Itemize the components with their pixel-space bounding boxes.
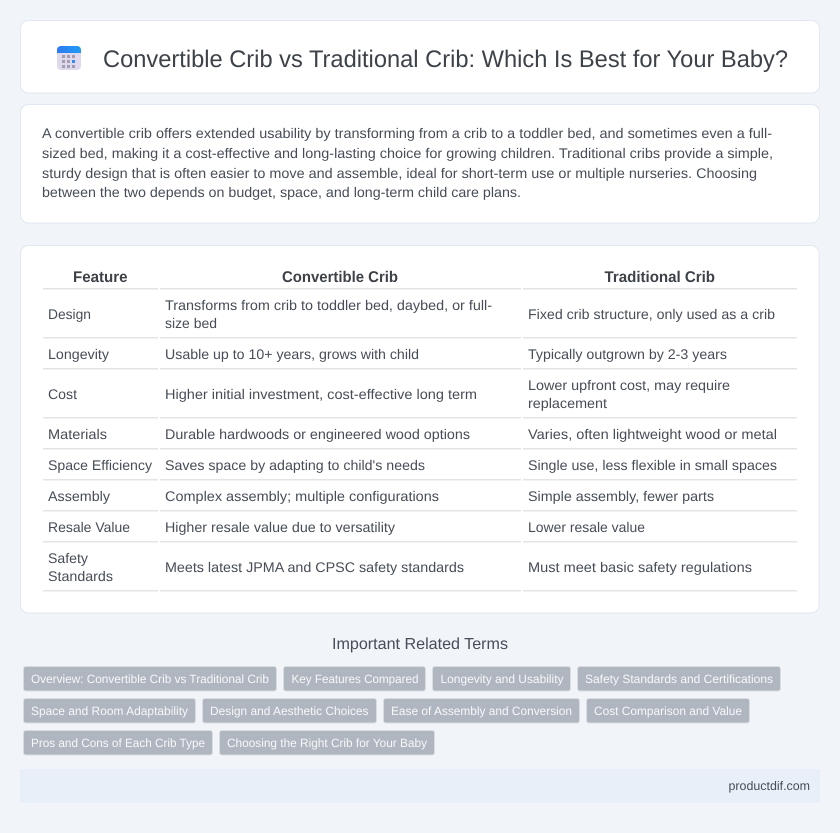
- pill: [578, 666, 780, 691]
- heading: important related terms: Important Related Terms: [332, 636, 508, 653]
- row: assembly: Complex assembly; multiple configurations: [165, 488, 439, 504]
- row: longevity: Typically outgrown by 2-3 years: [528, 346, 727, 362]
- row: resale value: [48, 519, 645, 535]
- pill: Overview: Convertible Crib vs Traditional Crib: [31, 672, 269, 686]
- row: assembly: Simple assembly, fewer parts: [528, 488, 714, 504]
- panel: intro paragraph: sturdy design that is often easier to move and assemble, ideal for short-term use or multiple nurseries. Choosing: [42, 165, 757, 181]
- pill: Design and Aesthetic Choices: [210, 704, 368, 718]
- row: resale value: Resale Value: [48, 519, 130, 535]
- pill: [384, 698, 580, 723]
- pill: Space and Room Adaptability: [31, 704, 188, 718]
- pill: [24, 666, 276, 691]
- row: longevity: [48, 346, 727, 362]
- pill: Ease of Assembly and Conversion: [391, 704, 572, 718]
- row: space efficiency: Saves space by adapting to child's needs: [165, 457, 425, 473]
- pill: [586, 698, 750, 723]
- row: design: size bed: [165, 315, 217, 331]
- pill: [432, 666, 570, 691]
- panel: intro paragraph: sized bed, making it a cost-effective and long-lasting choice for growing children. Traditional cribs provide a simple,: [42, 145, 773, 161]
- row: design: Design: [48, 306, 91, 322]
- row: longevity: Longevity: [48, 346, 109, 362]
- title: Convertible Crib vs Traditional Crib: Which Is Best for Your Baby?: [103, 46, 788, 73]
- pill: [24, 698, 196, 723]
- row: materials: [48, 426, 777, 442]
- row: space efficiency: [48, 457, 777, 473]
- row: cost: [48, 377, 730, 411]
- pill: Safety Standards and Certifications: [585, 672, 773, 686]
- table header: Traditional Crib: [604, 269, 715, 286]
- related term pills: [24, 666, 780, 755]
- row: safety standards: Meets latest JPMA and CPSC safety standards: [165, 559, 464, 575]
- pill: [220, 730, 434, 755]
- row: materials: Materials: [48, 426, 107, 442]
- pill: Choosing the Right Crib for Your Baby: [227, 736, 427, 750]
- row: cost: Higher initial investment, cost-effective long term: [165, 386, 477, 402]
- row: space efficiency: Single use, less flexible in small spaces: [528, 457, 777, 473]
- row: resale value: Lower resale value: [528, 519, 645, 535]
- row: cost: Cost: [48, 386, 77, 402]
- pill: [202, 698, 376, 723]
- row: materials: Durable hardwoods or engineered wood options: [165, 426, 470, 442]
- footer: [20, 769, 820, 803]
- row: safety standards: Standards: [48, 568, 113, 584]
- pill: Key Features Compared: [292, 672, 418, 686]
- pill: [284, 666, 426, 691]
- row: cost: replacement: [528, 395, 607, 411]
- panel: title header: [20, 20, 820, 93]
- panel: intro paragraph: [20, 104, 820, 223]
- panel: intro paragraph: A convertible crib offers extended usability by transforming from a crib to a toddler bed, and sometimes even a full-: [42, 125, 772, 141]
- row: longevity: Usable up to 10+ years, grows with child: [165, 346, 419, 362]
- row: design: Transforms from crib to toddler bed, daybed, or full-: [165, 297, 492, 313]
- panel: comparison table: [20, 246, 819, 613]
- row: design: [48, 297, 775, 331]
- row: assembly: Assembly: [48, 488, 110, 504]
- pill: Cost Comparison and Value: [594, 704, 742, 718]
- icon: calendar: [57, 46, 81, 70]
- panel: intro paragraph: between the two depends on budget, space, and long-term child care plans.: [42, 184, 521, 200]
- row: safety standards: Safety: [48, 550, 88, 566]
- table header: Convertible Crib: [282, 269, 398, 286]
- footer: productdif.com: [728, 779, 810, 793]
- pill: Pros and Cons of Each Crib Type: [31, 736, 205, 750]
- table header: Feature: [73, 269, 128, 286]
- row: space efficiency: Space Efficiency: [48, 457, 152, 473]
- row: safety standards: [48, 550, 752, 584]
- row: design: Fixed crib structure, only used as a crib: [528, 306, 775, 322]
- table header: [73, 269, 715, 286]
- row: cost: Lower upfront cost, may require: [528, 377, 730, 393]
- row: resale value: Higher resale value due to versatility: [165, 519, 395, 535]
- pill: [24, 730, 212, 755]
- row: materials: Varies, often lightweight wood or metal: [528, 426, 777, 442]
- pill: Longevity and Usability: [440, 672, 564, 686]
- row: safety standards: Must meet basic safety regulations: [528, 559, 752, 575]
- row: assembly: [48, 488, 714, 504]
